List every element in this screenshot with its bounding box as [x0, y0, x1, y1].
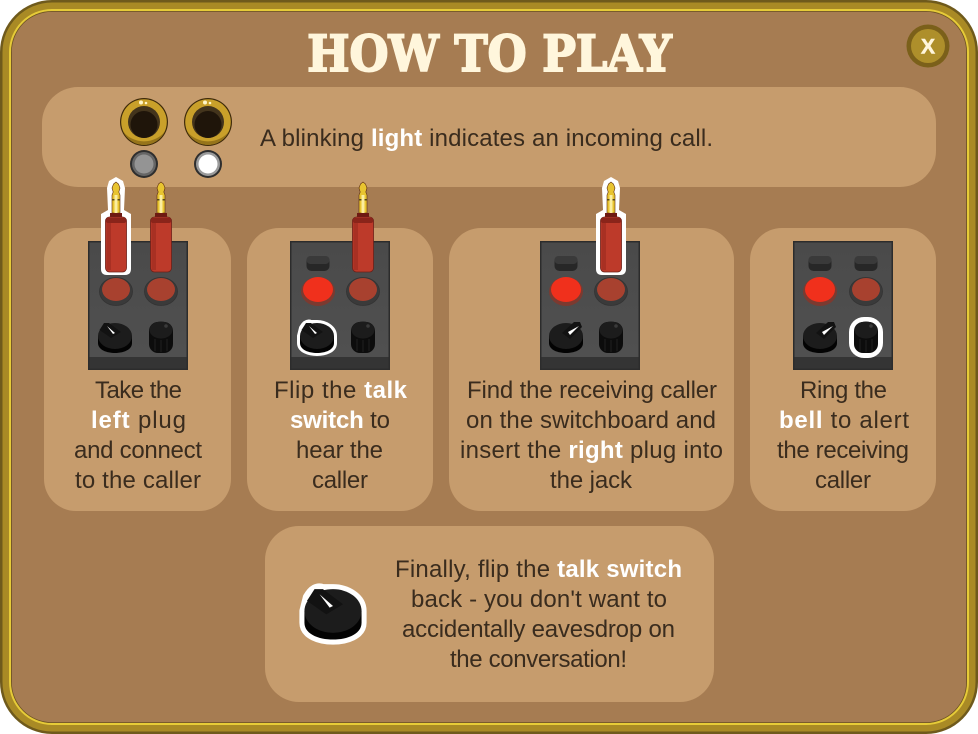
panel: final step — [265, 526, 714, 702]
text: step 2 — [274, 377, 408, 494]
switchboard 1 — [88, 177, 188, 370]
text: step 1: and connect — [74, 437, 202, 464]
icon: left plug highlighted — [101, 177, 131, 275]
icon: jack idle — [120, 98, 168, 146]
panel: step 3 — [449, 177, 734, 511]
icon: light on — [194, 150, 222, 178]
text: step 2: caller — [312, 467, 368, 494]
text: final step: Finally, flip the talk switch — [395, 556, 682, 583]
text: step 1: left plug — [91, 407, 186, 434]
text: step 1 — [74, 377, 202, 494]
switchboard 3 — [540, 177, 640, 370]
close button — [906, 24, 950, 68]
close button: X — [921, 36, 935, 58]
text: step 4: the receiving — [777, 437, 909, 464]
text: step 1: Take the — [95, 377, 182, 404]
icon: right plug — [150, 182, 172, 272]
text: step 3: on the switchboard and — [466, 407, 716, 434]
icon: talk switch — [304, 588, 362, 640]
text: final step: the conversation! — [450, 646, 627, 673]
switchboard 2 — [290, 182, 390, 370]
switchboard 4 — [793, 241, 893, 370]
panel: step 4 — [750, 228, 936, 511]
text: step 4: Ring the — [800, 377, 887, 404]
text: final step: back - you don't want to — [411, 586, 667, 613]
panel: step 2 — [247, 182, 433, 511]
icon: jack blinking — [184, 98, 232, 146]
text: step 3: the jack — [550, 467, 633, 494]
text: step 3: insert the right plug into — [460, 437, 723, 464]
text: step 2: Flip the talk — [274, 377, 408, 404]
text: final step: accidentally eavesdrop on — [402, 616, 675, 643]
text: step 2: hear the — [296, 437, 383, 464]
icon: right plug highlighted — [596, 177, 626, 275]
icon: light off — [130, 150, 158, 178]
panel: step 1 — [44, 177, 231, 511]
panel: incoming call — [42, 87, 936, 187]
text: step 2: switch to — [290, 407, 390, 434]
text: step 4: bell to alert — [779, 407, 909, 434]
text: step 3: Find the receiving caller — [467, 377, 717, 404]
text: step 1: to the caller — [75, 467, 201, 494]
text: blinking light: A blinking light indicates an incoming call. — [260, 125, 713, 152]
icon: right plug — [352, 182, 374, 272]
text: step 4: caller — [815, 467, 871, 494]
title: HOW TO PLAY — [307, 25, 673, 84]
text: step 3 — [460, 377, 723, 494]
text: final step — [395, 556, 682, 673]
text: step 4 — [777, 377, 909, 494]
